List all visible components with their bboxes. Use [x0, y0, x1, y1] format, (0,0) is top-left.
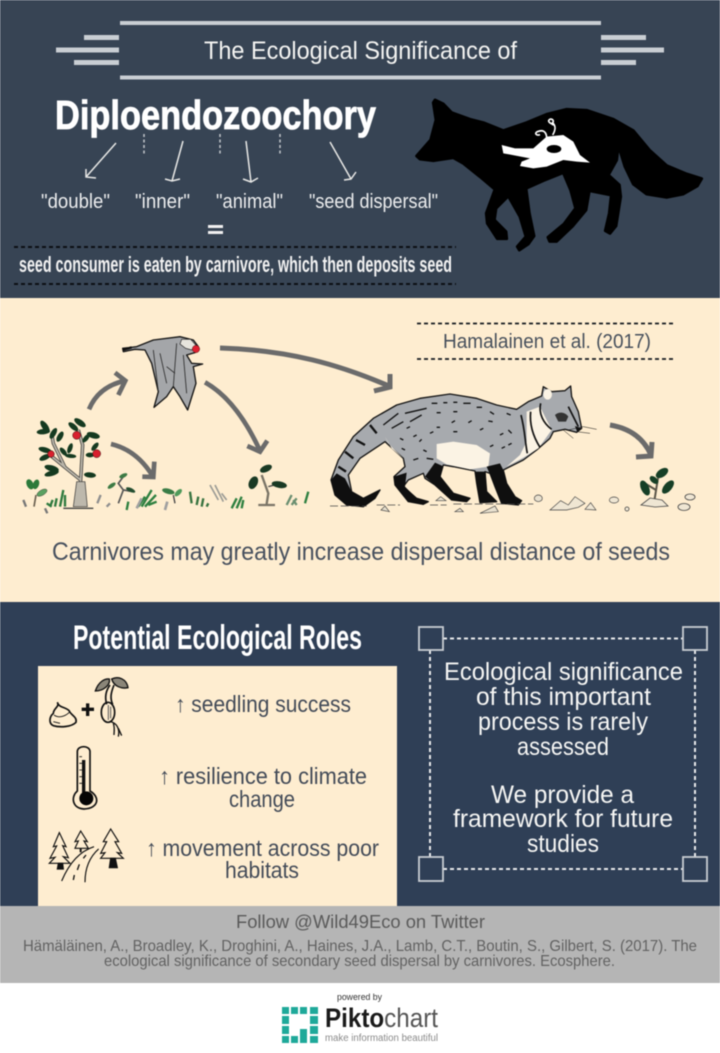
icon: bat carrying fruit: [123, 337, 203, 410]
logo: Piktochart: powered by: [337, 992, 382, 1002]
icon: thermometer: [73, 747, 97, 809]
section: footer grey background: [0, 906, 720, 983]
callout text: process is rarely: [478, 708, 648, 736]
text: movement across poor habitats: [146, 835, 379, 883]
callout text: assessed: [517, 733, 609, 761]
title text: The Ecological Significance of: [204, 37, 517, 65]
logo mark: [282, 1007, 318, 1043]
section: top background: [0, 0, 720, 298]
footer: twitter handle: Follow @Wild49Eco on Twitter: [236, 912, 485, 932]
text: resilience to climate change: change: [229, 786, 295, 812]
heading: Diploendozoochory: Diploendozoochory: [55, 92, 376, 138]
word-part labels: "inner": [135, 191, 190, 213]
arrow: bat to seedling: [205, 382, 267, 452]
icon: trees and road: [49, 829, 123, 882]
panel: ecological roles: [38, 666, 397, 906]
citation with dashed rules: Hamalainen et al. (2017): [443, 331, 651, 353]
icon: dung plus seedling: [50, 678, 128, 737]
heading: Potential Ecological Roles: Potential Ecological Roles: [73, 619, 362, 657]
scene: civet carnivore: [330, 386, 619, 513]
icon: fruiting tree: [36, 416, 101, 508]
callout text: We provide a: [491, 781, 634, 809]
title banner: [56, 21, 664, 80]
icon: deposited seedling with rocks: [625, 466, 695, 511]
definition with dashed rules: [14, 247, 456, 284]
arrow: carnivore to deposited seed: [610, 425, 652, 457]
section: lower dark background: [0, 602, 720, 906]
word-part labels: "seed dispersal": [309, 191, 438, 213]
arrow: tree to bat: [89, 373, 125, 409]
word-part labels: "animal": [216, 191, 283, 213]
text: resilience to climate change: [159, 763, 367, 812]
text: movement across poor habitats: habitats: [225, 857, 299, 883]
callout text: of this important: [476, 683, 651, 711]
arrow: bat to carnivore: [220, 348, 390, 391]
section: logo white background: [0, 983, 720, 1053]
footer: reference: [23, 938, 697, 970]
callout: framework box: [419, 627, 707, 881]
word-part labels: "double": [41, 191, 110, 213]
icon: civet body: [331, 386, 582, 507]
callout text: Ecological significance: [444, 658, 683, 686]
arrow: tree to ground: [111, 444, 154, 477]
civet black legs and tail tip: [331, 463, 522, 507]
logo: Piktochart: [282, 992, 438, 1044]
text: seedling success: ↑ seedling success: [175, 691, 351, 717]
footer: reference: ecological significance of secondary seed dispersal by carnivores. Ecosphere.: [104, 953, 615, 970]
callout text: studies: [527, 830, 599, 858]
caption: carnivores increase dispersal distance: Carnivores may greatly increase dispersal distance of seeds: [52, 538, 670, 566]
callout text: [444, 658, 683, 858]
icon: fox silhouette with eaten seed consumer: [417, 100, 702, 250]
citation with dashed rules: [417, 324, 675, 359]
ground line and rocks: [330, 495, 619, 513]
equals sign: [208, 225, 223, 234]
word-part labels: [41, 191, 438, 213]
civet white belly and neck: [385, 389, 552, 469]
section: cream background: [0, 298, 720, 602]
callout text: framework for future: [453, 805, 673, 833]
scene: bat and plant dispersal: [23, 337, 308, 513]
text: movement across poor habitats: ↑ movement across poor: [146, 835, 379, 861]
civet stripes and spots: [338, 402, 597, 472]
definition with dashed rules: seed consumer is eaten by carnivore, which then deposits seed: [19, 252, 452, 277]
logo: Piktochart: Piktochart: [325, 1003, 438, 1033]
ground seedlings and grass: [23, 472, 308, 513]
text: resilience to climate change: ↑ resilience to climate: [159, 763, 367, 789]
word-part dividers and arrows: [86, 134, 356, 182]
icon: sapling: [247, 463, 287, 505]
logo: Piktochart: make information beautiful: [325, 1033, 438, 1044]
